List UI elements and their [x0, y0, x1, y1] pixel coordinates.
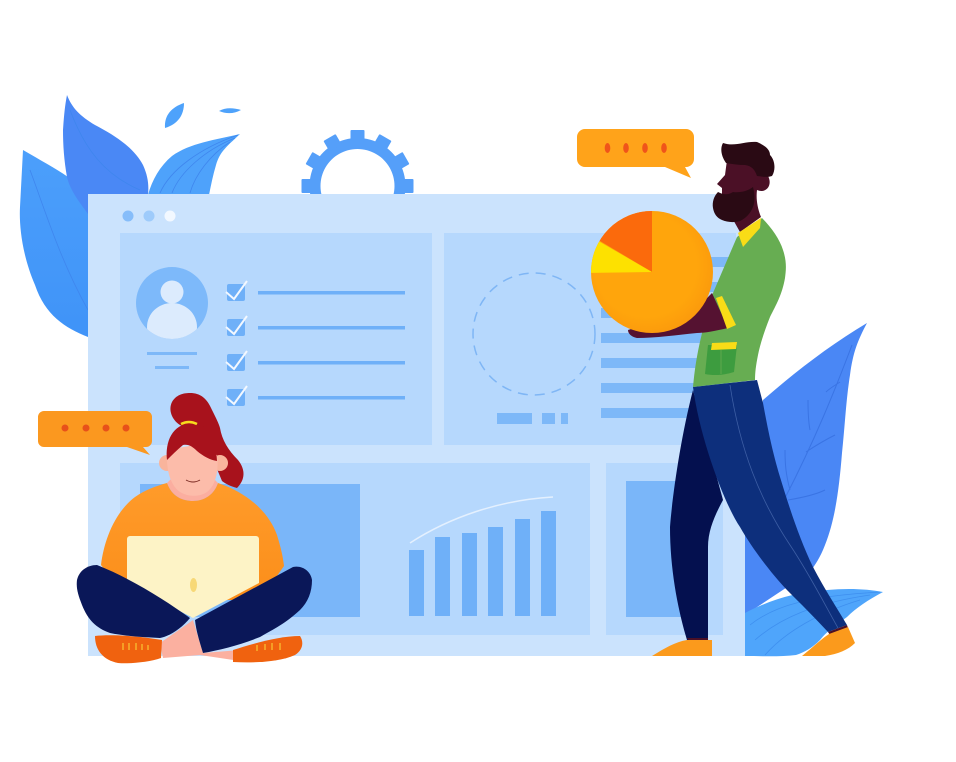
left leaf group — [20, 95, 241, 340]
right leaf group — [745, 323, 883, 656]
gear — [302, 130, 414, 194]
front leg — [693, 380, 847, 632]
image placeholder — [140, 484, 360, 617]
back leg — [670, 390, 723, 640]
laptop — [127, 536, 259, 618]
beard — [713, 187, 754, 222]
left shoe — [95, 635, 162, 663]
speech bubble: left — [38, 411, 152, 455]
cuff — [716, 296, 736, 329]
right leg — [195, 567, 312, 653]
checklist — [226, 281, 405, 406]
leaf veins — [30, 110, 238, 310]
leaf veins — [785, 345, 852, 500]
trouser cuffs — [687, 625, 848, 641]
leaf: lower right — [745, 589, 883, 656]
leaf: tall dark — [63, 95, 148, 214]
smile — [186, 480, 200, 482]
neck and face — [717, 160, 770, 232]
pocket — [705, 342, 737, 375]
leaf: floating large — [165, 103, 184, 128]
avatar — [136, 267, 208, 339]
shirt — [693, 218, 786, 387]
back shoe — [652, 640, 712, 656]
illustration — [20, 95, 883, 664]
bar chart — [409, 511, 556, 616]
slice: orange — [600, 211, 652, 272]
leaf: large right — [745, 323, 867, 615]
man holding pie chart — [585, 142, 855, 656]
sweater — [101, 483, 284, 600]
arm — [628, 293, 728, 338]
hair tie — [181, 422, 197, 424]
right shoe — [233, 636, 302, 662]
hair front — [167, 423, 217, 461]
dashed circle — [473, 273, 595, 395]
lower leaf veins — [750, 592, 880, 655]
pie chart — [585, 205, 713, 333]
slice: yellow — [591, 242, 652, 273]
feet — [160, 620, 240, 661]
collar — [738, 218, 761, 247]
panel: chart summary — [444, 233, 736, 445]
legend bars — [497, 413, 568, 424]
panel: bar chart — [120, 463, 590, 635]
trend line — [410, 497, 553, 543]
left ear — [159, 455, 175, 471]
shoe laces — [123, 643, 280, 651]
leaf: floating small — [219, 108, 241, 113]
left leg — [77, 565, 190, 638]
window dots — [122, 210, 176, 222]
front shoe — [802, 627, 855, 656]
panel: profile — [120, 233, 432, 445]
panel: side image — [606, 463, 723, 635]
face — [167, 445, 218, 496]
right ear — [212, 455, 228, 471]
leaf: right light — [148, 134, 240, 195]
hair — [721, 142, 774, 177]
dashboard window — [88, 194, 745, 656]
leaf: left light — [20, 150, 95, 340]
neck — [167, 470, 218, 501]
speech bubble: right — [577, 129, 694, 178]
ponytail — [170, 393, 244, 488]
trouser seam — [730, 385, 838, 628]
name lines — [147, 352, 197, 369]
window frame — [88, 194, 745, 656]
text lines — [601, 257, 735, 418]
woman with laptop — [77, 393, 312, 663]
